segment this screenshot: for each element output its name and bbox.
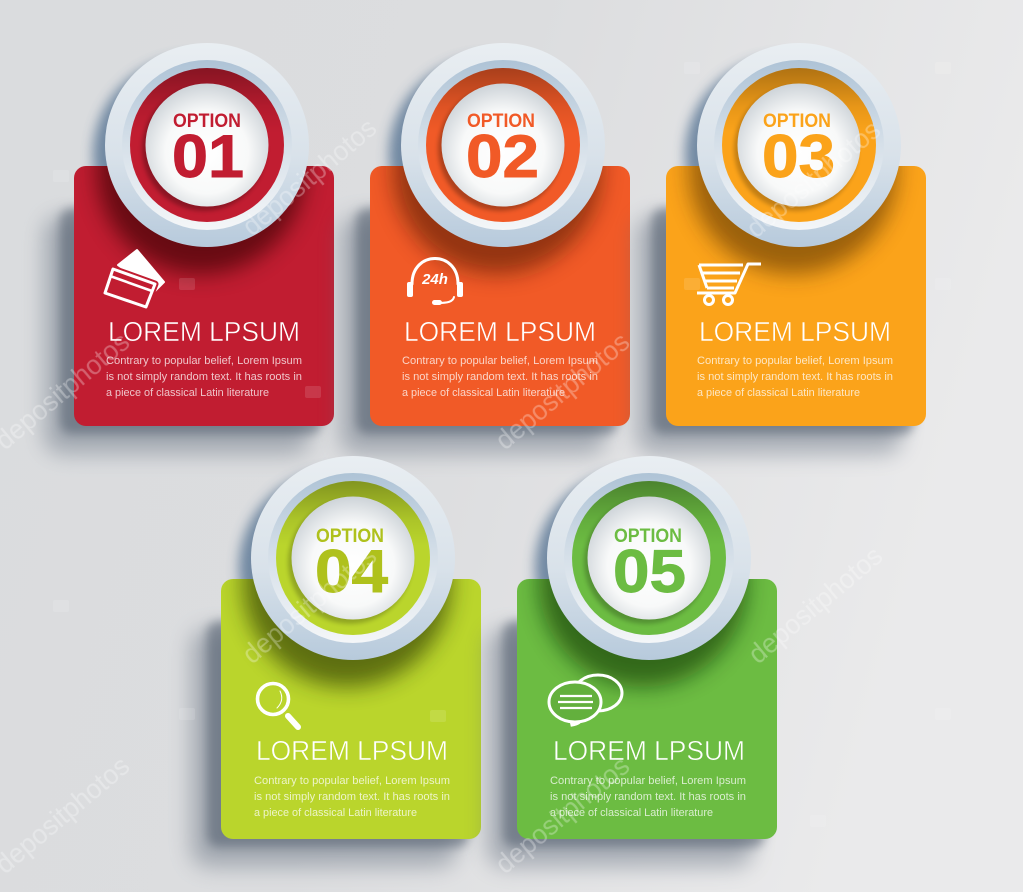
badge: option 05: OPTION [614,525,682,547]
heading: option 03: LOREM LPSUM [699,316,891,347]
icon: shopping cart [697,264,761,304]
badge: option 02: OPTION [467,110,535,132]
text block: option 03: a piece of classical Latin literature [697,387,860,399]
text block: option 02 [402,355,598,399]
text block: option 01: a piece of classical Latin literature [106,387,269,399]
text block: option 02: Contrary to popular belief, Lorem Ipsum [402,355,598,367]
card: option 05 [517,579,777,839]
card: option 04 [221,579,481,839]
text block: option 01: Contrary to popular belief, Lorem Ipsum [106,355,302,367]
text block: option 02: a piece of classical Latin literature [402,387,565,399]
text block: option 01: is not simply random text. It has roots in [106,371,302,383]
panel: option 01 [44,43,334,454]
heading: option 02: LOREM LPSUM [404,316,596,347]
badge: option 05 [547,456,751,660]
badge: option 03 [697,43,901,247]
icon: headset 24h: 24h [421,271,448,288]
badge: option 03: OPTION [763,110,831,132]
badge: option 04: 04 [315,538,389,605]
card: option 02 [370,166,630,426]
card: option 03 [666,166,926,426]
panel: option 02 [340,43,630,454]
text block: option 03: is not simply random text. It has roots in [697,371,893,383]
watermarks: depositphotos [742,540,888,670]
text block: option 03: Contrary to popular belief, Lorem Ipsum [697,355,893,367]
badge: option 01: 01 [172,123,244,190]
icon: magnifier [258,684,298,727]
panel: option 05 [487,456,777,867]
badge: option 02: 02 [466,123,539,190]
panel: option 04 [191,456,481,867]
text block: option 03 [697,355,893,399]
badge: option 04: OPTION [316,525,384,547]
badge: option 01 [105,43,309,247]
text block: option 04: Contrary to popular belief, Lorem Ipsum [254,775,450,787]
heading: option 01: LOREM LPSUM [108,316,300,347]
watermarks: depositphotos [236,112,382,242]
text block: option 01 [106,355,302,399]
icon: headset 24h [407,258,463,305]
watermarks: depositphotos [740,114,886,244]
heading: option 05: LOREM LPSUM [553,735,745,766]
text block: option 05: is not simply random text. It has roots in [550,791,746,803]
icon: credit cards [105,250,164,307]
text block: option 05: Contrary to popular belief, Lorem Ipsum [550,775,746,787]
heading: option 04: LOREM LPSUM [256,735,448,766]
icon: speech bubbles [549,675,622,725]
watermarks: depositphotos [236,540,382,670]
text block: option 04 [254,775,450,819]
watermark camera marks [53,62,951,827]
badge: option 02 [401,43,605,247]
text block: option 05: a piece of classical Latin literature [550,807,713,819]
badge: option 01: OPTION [173,110,241,132]
card: option 01 [74,166,334,426]
watermarks: depositphotos [489,750,635,880]
panel: option 03 [636,43,926,454]
watermarks: depositphotos [489,326,635,456]
text block: option 02: is not simply random text. It has roots in [402,371,598,383]
badge: option 04 [251,456,455,660]
watermarks [0,112,888,880]
badge: option 05: 05 [613,538,686,605]
text block: option 05 [550,775,746,819]
text block: option 04: is not simply random text. It has roots in [254,791,450,803]
text block: option 04: a piece of classical Latin literature [254,807,417,819]
badge: option 03: 03 [762,123,835,190]
